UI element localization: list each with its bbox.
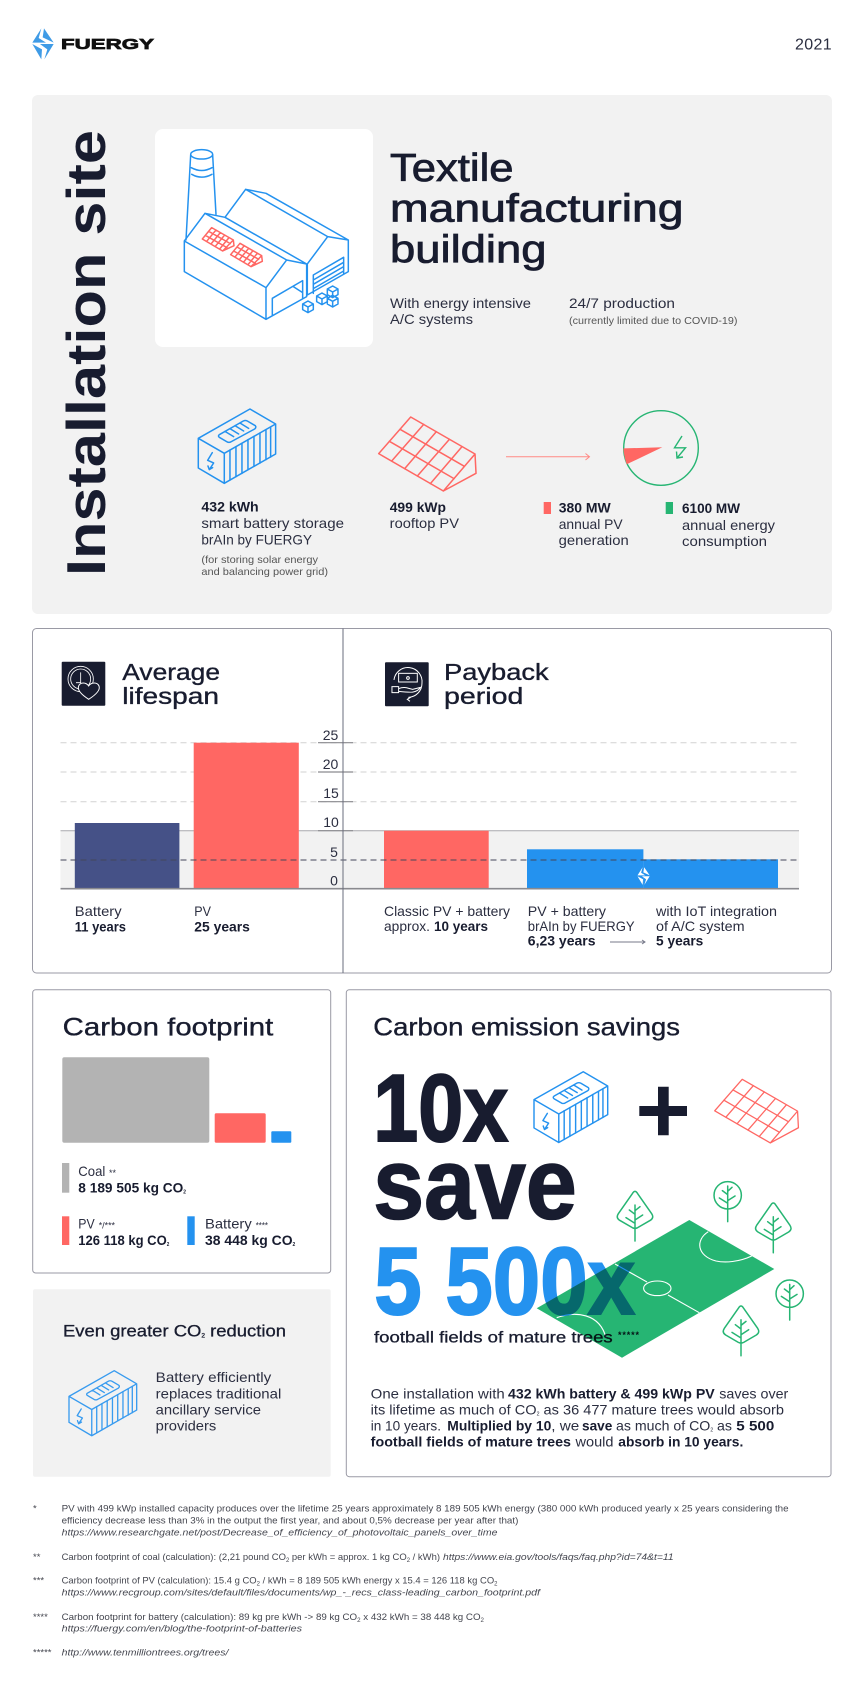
text: battery replaces ancillary services: Battery efficiently bbox=[156, 1369, 271, 1385]
text: rooftop PV: rooftop PV bbox=[390, 515, 460, 531]
legend: battery: **** bbox=[256, 1221, 268, 1231]
label: classic payback bbox=[384, 903, 510, 934]
icon: battery container bbox=[69, 1371, 137, 1436]
title: textile manufacturing building: building bbox=[390, 228, 546, 272]
footnote: PV footprint: / kWh = 8 189 505 kWh energy x 15.4 = 126 118 kg CO bbox=[260, 1576, 494, 1587]
bar: battery 11 years bbox=[75, 823, 179, 889]
label: IoT payback: with IoT integration bbox=[655, 903, 777, 919]
legend: annual PV generation: generation bbox=[559, 532, 629, 548]
text: savings explanation: 432 kWh battery & 499 kWp PV bbox=[508, 1385, 715, 1401]
bar: PV + battery brAIn bbox=[527, 849, 643, 889]
legend: annual energy consumption: 6100 MW bbox=[682, 500, 741, 516]
caption: football fields: football fields of mature trees bbox=[374, 1330, 613, 1347]
legend: annual PV generation bbox=[544, 500, 629, 548]
legend: coal: Coal bbox=[78, 1163, 105, 1179]
legend: coal: 2 bbox=[183, 1189, 186, 1195]
label: battery lifespan: Battery bbox=[75, 903, 122, 919]
heading: 2 bbox=[201, 1334, 206, 1340]
title: textile manufacturing building bbox=[390, 147, 684, 272]
text: battery storage bbox=[201, 499, 344, 578]
text: savings explanation: in 10 years. bbox=[371, 1418, 441, 1434]
text: battery storage: smart battery storage bbox=[201, 515, 344, 531]
footnote: PV footprint: https://www.recgroup.com/sites/default/files/documents/wp_-_recs_class-leading_carbon_footprint.pdf bbox=[62, 1588, 542, 1599]
text: production bbox=[569, 295, 738, 327]
footnote: coal: 2 bbox=[286, 1558, 290, 1564]
icon: clock and heart bbox=[62, 662, 105, 706]
legend: coal: 8 189 505 kg CO bbox=[78, 1179, 186, 1195]
label: PV lifespan bbox=[194, 903, 250, 935]
panel: even greater CO2 reduction bbox=[33, 1289, 331, 1477]
logo: FUERGY bbox=[32, 28, 154, 59]
divider bbox=[342, 628, 344, 973]
legend: PV: 2 bbox=[167, 1242, 170, 1248]
text: energy intensive: With energy intensive bbox=[390, 295, 531, 311]
legend: battery bbox=[187, 1216, 296, 1248]
legend: coal: ** bbox=[109, 1168, 116, 1178]
label: classic payback: 10 years bbox=[434, 918, 488, 934]
text: battery replaces ancillary services: replaces traditional bbox=[156, 1385, 281, 1401]
text: battery storage: (for storing solar energy bbox=[201, 554, 319, 566]
chart: footprint comparison bbox=[62, 1057, 291, 1143]
panel: installation site bbox=[32, 95, 832, 614]
footnote: PV footprint: 2 bbox=[494, 1582, 498, 1588]
legend: battery: 38 448 kg CO bbox=[205, 1232, 293, 1248]
heading: payback period: period bbox=[444, 683, 523, 709]
icon: hand with money bbox=[385, 662, 429, 706]
footnote: trees: ***** bbox=[33, 1648, 52, 1659]
panel: carbon emission savings bbox=[346, 990, 831, 1477]
heading: payback period: Payback bbox=[444, 659, 549, 685]
bar: PV 25 years bbox=[194, 743, 299, 889]
icon: solar panel bbox=[715, 1079, 798, 1143]
footnote: coal: Carbon footprint of coal (calculation): (2,21 pound CO bbox=[62, 1552, 287, 1563]
label: battery lifespan bbox=[75, 903, 126, 935]
axis labels: 25 bbox=[323, 727, 338, 743]
text: savings explanation: would bbox=[574, 1434, 614, 1450]
heading: Even greater CO bbox=[63, 1322, 191, 1341]
heading: Carbon footprint bbox=[63, 1014, 273, 1042]
icon: battery container bbox=[198, 409, 276, 483]
heading: average lifespan bbox=[62, 659, 220, 709]
heading: average lifespan: Average bbox=[122, 659, 220, 685]
legend: annual energy consumption: consumption bbox=[682, 533, 767, 549]
text: battery storage: and balancing power grid) bbox=[201, 566, 328, 578]
footnote: battery footprint: 2 bbox=[357, 1618, 361, 1624]
legend: annual energy consumption bbox=[666, 500, 775, 549]
footnote: PV footprint: Carbon footprint of PV (calculation): 15.4 g CO bbox=[62, 1576, 258, 1587]
big word: save: save bbox=[373, 1128, 577, 1240]
bar: classic PV + battery bbox=[384, 831, 489, 889]
arrow: PV to generation bbox=[506, 454, 590, 460]
heading: average lifespan: lifespan bbox=[122, 683, 219, 709]
text: rooftop PV: 499 kWp bbox=[390, 499, 446, 515]
icon: logo on bar bbox=[638, 867, 650, 885]
text: savings explanation: as bbox=[713, 1418, 732, 1434]
arrow: payback improvement bbox=[610, 940, 645, 944]
footnote: coal: 2 bbox=[407, 1558, 411, 1564]
axis labels: 10 bbox=[323, 814, 339, 830]
footnote: PV: PV with 499 kWp installed capacity produces over the lifetime 25 years approximately 8 189 505 kWh energy (380 000 kWh produced yearly x 25 years considering the bbox=[62, 1504, 789, 1515]
icons: trees bbox=[617, 1182, 803, 1356]
icon: factory building bbox=[184, 150, 348, 319]
text: savings explanation: saves over bbox=[719, 1385, 789, 1401]
text: battery replaces ancillary services bbox=[156, 1369, 281, 1434]
text: battery replaces ancillary services: ancillary service bbox=[156, 1402, 261, 1418]
text: savings explanation: as 36 477 mature trees would absorb bbox=[540, 1402, 784, 1418]
icon: solar panel bbox=[379, 417, 476, 491]
footnote: PV footprint: 2 bbox=[257, 1582, 261, 1588]
legend: battery: 2 bbox=[293, 1242, 296, 1248]
big number: 5 500x: 5 500x bbox=[374, 1228, 635, 1335]
chart band bbox=[60, 831, 799, 889]
label: PV lifespan: PV bbox=[194, 903, 212, 919]
footnote: PV: efficiency decrease less than 3% in the output the first year, and about 0,5% decrease per year after that) bbox=[62, 1516, 518, 1527]
card: factory illustration bbox=[155, 129, 373, 347]
text: battery storage: 432 kWh bbox=[201, 499, 259, 515]
axis labels: 0 bbox=[330, 873, 338, 889]
heading: Carbon emission savings bbox=[373, 1014, 680, 1042]
text: savings explanation: 5 500 bbox=[736, 1418, 775, 1434]
text: production: 24/7 production bbox=[569, 295, 675, 311]
text: savings explanation bbox=[371, 1385, 789, 1450]
footnote: PV footprint: *** bbox=[33, 1576, 44, 1587]
title: textile manufacturing building: Textile bbox=[390, 147, 514, 190]
wordmark: FUERGY bbox=[61, 36, 154, 53]
footnote: battery footprint: x 432 kWh = 38 448 kg CO bbox=[361, 1612, 481, 1623]
text: battery replaces ancillary services: providers bbox=[156, 1418, 216, 1434]
text: savings explanation: as much of CO bbox=[616, 1418, 709, 1434]
label: brAIn payback: PV + battery bbox=[528, 903, 606, 919]
text: savings explanation: absorb in 10 years. bbox=[618, 1434, 743, 1450]
label: brAIn payback: brAIn by FUERGY bbox=[528, 918, 635, 934]
footnote: battery footprint: https://fuergy.com/en/blog/the-footprint-of-batteries bbox=[62, 1624, 302, 1635]
legend: PV: */*** bbox=[99, 1221, 115, 1231]
text: savings explanation: save bbox=[582, 1418, 612, 1434]
heading: reduction bbox=[205, 1322, 286, 1341]
legend: PV: 126 118 kg CO bbox=[78, 1232, 173, 1248]
legend: coal bbox=[62, 1163, 186, 1195]
axis labels: 20 bbox=[323, 756, 338, 772]
legend: PV bbox=[62, 1216, 170, 1248]
footnote: PV footprint bbox=[33, 1576, 542, 1599]
text: production: (currently limited due to COVID-19) bbox=[569, 315, 738, 327]
label: classic payback: approx. bbox=[384, 918, 430, 934]
footnote: PV: https://www.researchgate.net/post/Decrease_of_efficiency_of_photovoltaic_panels_over_time bbox=[62, 1528, 497, 1539]
text: savings explanation: 2 bbox=[710, 1428, 713, 1434]
axis labels bbox=[323, 727, 339, 889]
footnote: battery footprint: Carbon footprint for battery (calculation): 89 kg pre kWh -> 89 kg CO bbox=[62, 1612, 350, 1623]
panel: carbon footprint bbox=[33, 990, 331, 1273]
label: IoT payback: 5 years bbox=[656, 932, 703, 948]
footnote: coal: per kWh = approx. 1 kg CO bbox=[289, 1552, 407, 1563]
text: battery storage: brAIn by FUERGY bbox=[201, 531, 313, 547]
footnote: PV: * bbox=[33, 1504, 37, 1515]
label: brAIn payback bbox=[528, 903, 635, 948]
text: savings explanation: Multiplied by 10 bbox=[447, 1418, 552, 1434]
footnote: battery footprint: **** bbox=[33, 1612, 48, 1623]
icon: plus bbox=[639, 1087, 687, 1135]
axis labels: 15 bbox=[323, 785, 339, 801]
vertical heading: Installation site: Installation site bbox=[55, 130, 117, 576]
chart: lifespan and payback bars bbox=[60, 727, 799, 889]
label: IoT payback: of A/C system bbox=[656, 918, 745, 934]
footnote: PV bbox=[33, 1504, 789, 1539]
bar: with IoT integration bbox=[643, 859, 778, 889]
label: IoT payback bbox=[655, 903, 777, 948]
panel: lifespan and payback charts bbox=[32, 628, 832, 973]
footnote: coal bbox=[33, 1552, 674, 1564]
text: savings explanation: , we bbox=[551, 1418, 580, 1434]
text: savings explanation: its lifetime as much of CO bbox=[371, 1402, 530, 1418]
axis labels: 5 bbox=[330, 844, 338, 860]
legend: annual PV generation: annual PV bbox=[559, 516, 623, 532]
year: 2021 bbox=[795, 36, 832, 54]
text: savings explanation: football fields of mature trees bbox=[371, 1434, 571, 1450]
label: battery lifespan: 11 years bbox=[75, 919, 126, 935]
footnote: battery footprint: 2 bbox=[481, 1618, 485, 1624]
legend: battery: Battery bbox=[205, 1216, 252, 1232]
legend: PV: PV bbox=[78, 1216, 95, 1232]
text: rooftop PV bbox=[390, 499, 460, 531]
footnote: coal: ** bbox=[33, 1552, 41, 1563]
caption: football fields: ***** bbox=[618, 1330, 639, 1340]
illustration: football field bbox=[537, 1220, 774, 1358]
heading: payback period bbox=[385, 659, 549, 709]
title: textile manufacturing building: manufacturing bbox=[390, 188, 684, 230]
label: PV lifespan: 25 years bbox=[194, 919, 250, 935]
footnotes bbox=[33, 1504, 789, 1659]
label: classic payback: Classic PV + battery bbox=[384, 903, 510, 919]
text: energy intensive: A/C systems bbox=[390, 311, 473, 327]
footnote: coal: / kWh) bbox=[410, 1552, 440, 1563]
label: brAIn payback: 6,23 years bbox=[528, 932, 596, 948]
big number: 10x: 10x bbox=[373, 1055, 508, 1162]
legend: annual PV generation: 380 MW bbox=[559, 500, 611, 516]
chart: generation vs consumption pie bbox=[623, 411, 698, 485]
text: energy intensive bbox=[390, 295, 531, 327]
icon: logo mark bbox=[32, 28, 54, 59]
footnote: trees: http://www.tenmilliontrees.org/trees/ bbox=[62, 1648, 230, 1659]
text: savings explanation: One installation with bbox=[371, 1385, 505, 1401]
text: savings explanation: 2 bbox=[537, 1412, 540, 1418]
icon: battery container bbox=[534, 1072, 608, 1143]
legend: annual energy consumption: annual energy bbox=[682, 517, 775, 533]
footnote: battery footprint bbox=[33, 1612, 485, 1635]
footnote: coal: https://www.eia.gov/tools/faqs/faq.php?id=74&t=11 bbox=[443, 1552, 674, 1563]
